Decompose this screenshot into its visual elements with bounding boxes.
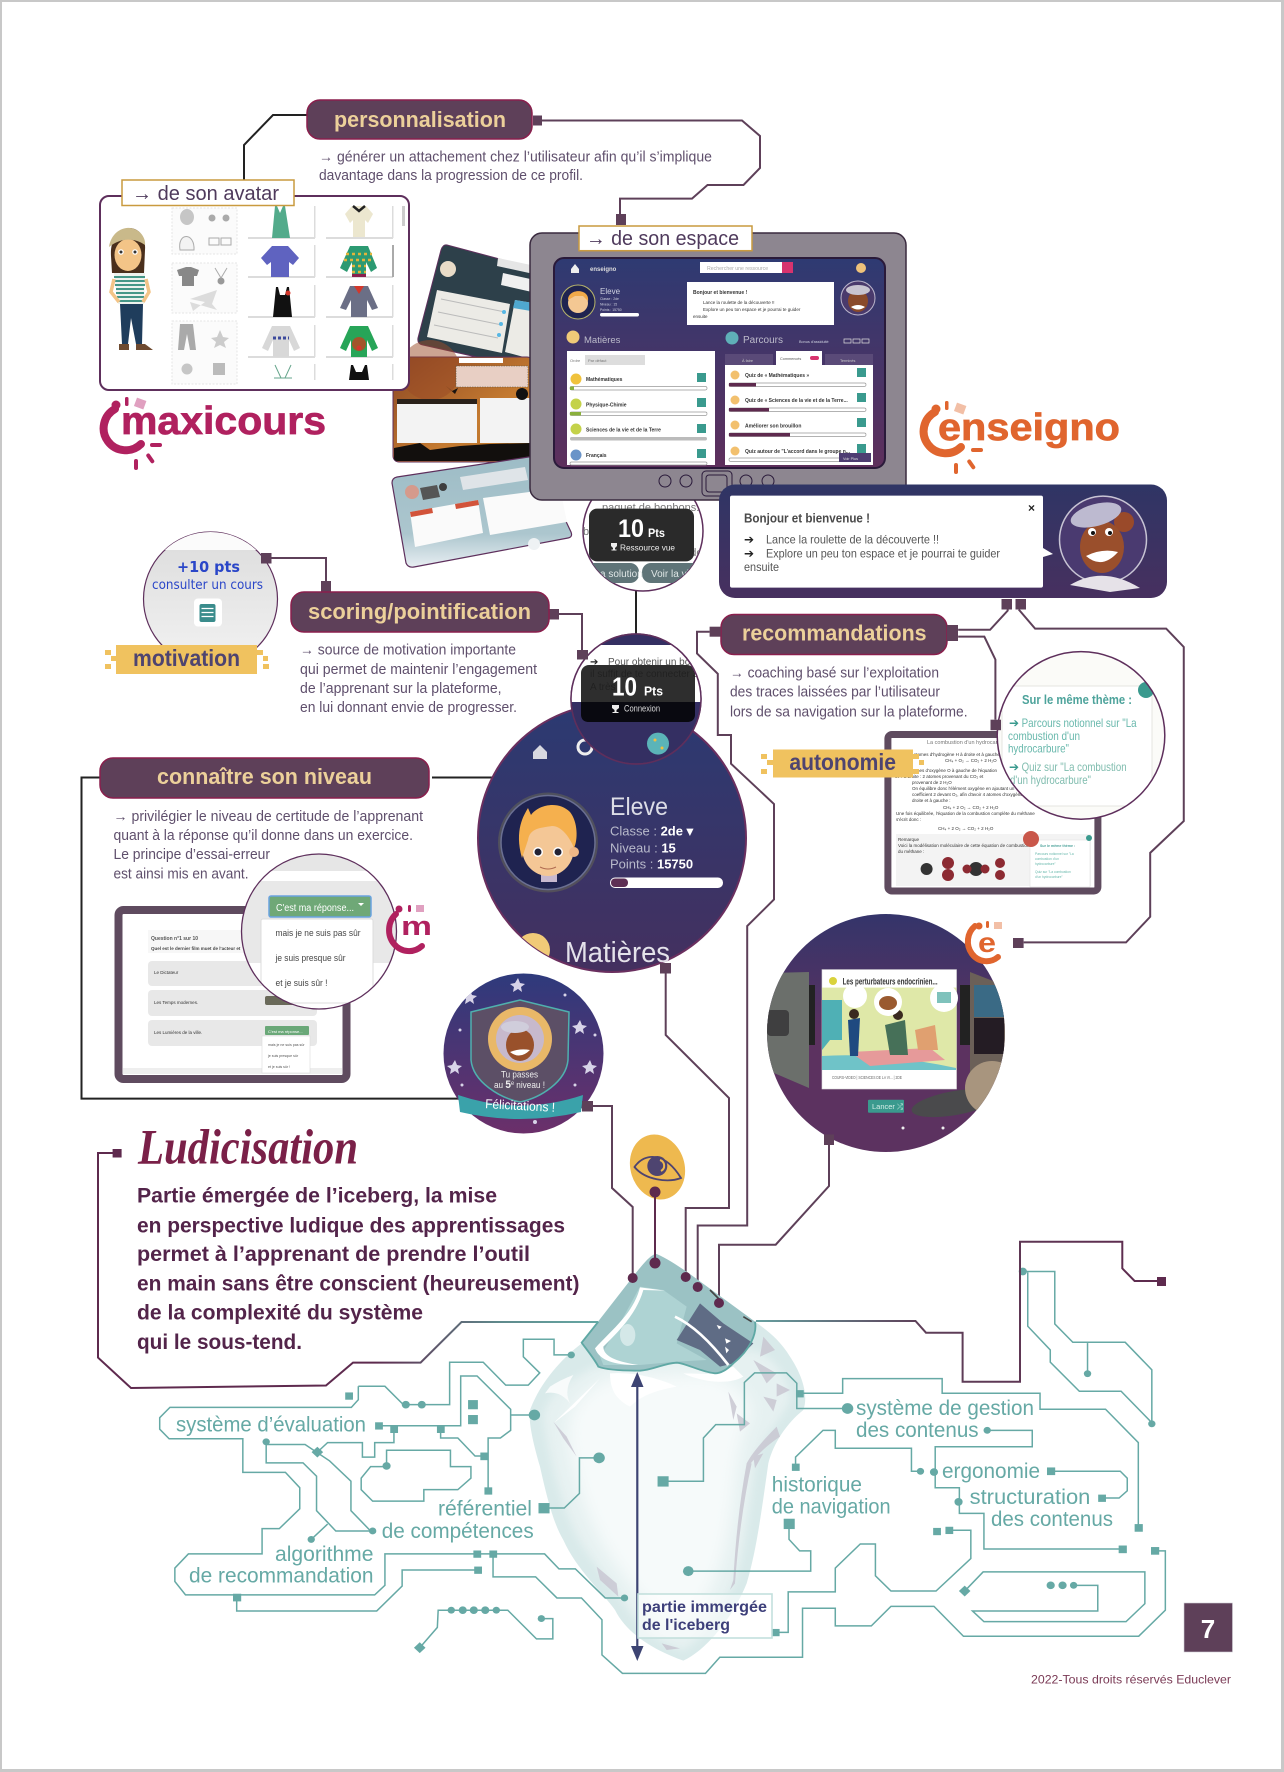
panel: chemistry course screen: d'un hydrocarbure"	[1035, 875, 1063, 879]
text: personnalisation description	[319, 150, 712, 184]
panel: bear welcome dialog: ➔	[744, 532, 754, 546]
text: ludicisation body: permet à l’apprenant de prendre l’outil	[137, 1243, 530, 1266]
panel: quiz laptop	[118, 910, 346, 1079]
video card: COURS-VIDEO | SCIENCES DE LA VI... | 2DE	[832, 1075, 902, 1080]
tablet screen: Sciences de la vie et de la Terre	[586, 428, 661, 434]
avatar parts column	[172, 208, 237, 384]
tag: motivation: motivation	[133, 645, 240, 671]
panel: chemistry course screen: Quiz sur "La combustion	[1035, 870, 1071, 874]
text: scoring description: → source de motivation importante	[300, 643, 516, 659]
tablet screen: Niveau : 15	[600, 302, 617, 306]
tablet screen: Quiz de « Sciences de la vie et de la Terre...	[745, 398, 848, 404]
connector: personnalisation to avatar	[244, 115, 307, 180]
callout: congratulations badge	[444, 974, 604, 1134]
labels: left circuit systems: référentiel	[438, 1498, 532, 1521]
callout: points circle ressource vue: voir un demi-paquet de bonb	[590, 547, 730, 559]
iceberg immerged part	[530, 1322, 805, 1661]
labels: right circuit systems: ergonomie	[942, 1460, 1040, 1483]
panel: quiz laptop: C'est ma réponse...	[268, 1029, 303, 1034]
panel: quiz laptop: Les Temps modernes.	[154, 1000, 198, 1005]
callout: congratulations badge: au 5	[494, 1079, 512, 1091]
tag: motivation	[105, 645, 269, 674]
connector: score points to scoring	[271, 558, 331, 592]
connector: points circles link	[635, 590, 637, 636]
heading: personnalisation	[307, 100, 532, 139]
callout: points circle ressource vue: Ressource vue	[620, 543, 675, 553]
iceberg dots	[628, 1258, 724, 1308]
text: ludicisation body	[137, 1185, 579, 1354]
text: scoring description: qui permet de maintenir l’engagement	[300, 662, 537, 678]
title: Ludicisation: Ludicisation	[137, 1119, 358, 1175]
callout: answer certainty zoom: C'est ma réponse...	[276, 903, 354, 914]
panel: chemistry course screen: CH₄ + O₂ → CO₂ + 2 H₂O	[945, 758, 997, 763]
labels: right circuit systems: des contenus	[856, 1419, 979, 1442]
tag: autonomie	[761, 749, 924, 778]
text: connaitre description: Le principe d’essai-erreur	[114, 847, 270, 863]
callout: points circle connexion	[570, 633, 702, 765]
text: scoring description: en lui donnant envie de progresser.	[300, 700, 517, 716]
iceberg emerged tip	[582, 1254, 755, 1373]
labels: right circuit systems: système de gestion	[856, 1397, 1034, 1420]
panel: chemistry course screen: combustion d'un	[1035, 857, 1059, 861]
panel: bear welcome dialog: Bonjour et bienvenue !	[744, 511, 870, 525]
panel: halloween screenshot	[393, 340, 533, 462]
labels: right circuit systems: historique	[772, 1474, 862, 1497]
callout: motivation points circle: +10 pts	[177, 558, 240, 576]
text: connaitre description	[114, 809, 423, 882]
panel: quiz laptop: Quel est le dernier film muet de l'acteur et	[151, 946, 241, 951]
tablet screen: Améliorer son brouillon	[745, 424, 801, 430]
panel: learner profile circle: Classe : 2de ▾	[610, 824, 694, 839]
clothing cards	[248, 206, 405, 380]
video card: Les perturbateurs endocrinien...	[843, 976, 938, 986]
connector endpoints under bear dialog	[1002, 599, 1026, 610]
text: connaitre description: quant à la réponse qu’il donne dans un exercice.	[114, 828, 413, 844]
circuit: left network	[160, 1339, 642, 1673]
tablet screen: Commencés	[780, 357, 801, 361]
tablet screen: Terminés	[840, 359, 856, 363]
tablet screen: Bonjour et bienvenue !	[693, 290, 748, 296]
panel: chemistry course screen: provenant de 2 H₂O	[912, 780, 952, 785]
connector: ludicisation to iceberg	[98, 1149, 598, 1388]
text: recommandations description: lors de sa navigation sur la plateforme.	[730, 705, 968, 721]
page number	[1184, 1603, 1232, 1652]
tablet screen: Quiz de « Mathématiques »	[745, 373, 809, 379]
icon: avatar girl	[109, 228, 153, 350]
callout: same theme recommendations zoom: ➔	[1009, 760, 1019, 774]
tablet screen: À faire	[742, 359, 753, 363]
tablet screen: enseigno	[590, 267, 617, 273]
panel: bear welcome dialog: ×	[1028, 501, 1035, 515]
connector: connaitre son niveau frame	[82, 778, 510, 1099]
panel: chemistry course screen: coefficient 2 devant O₂, afin d'avoir 4 atomes d'oxygène	[912, 792, 1023, 797]
panel: bear welcome dialog: Lance la roulette de la découverte !!	[766, 532, 939, 546]
label: partie immergee de l'iceberg: partie immergée	[642, 1599, 767, 1616]
panel: chemistry course screen	[888, 734, 1098, 891]
connector: profile to iceberg	[666, 973, 729, 1277]
heading: scoring/pointification	[291, 592, 549, 632]
logo: small enseigno e: e	[978, 927, 996, 958]
logo: small enseigno e	[968, 921, 1002, 961]
panel: bear welcome dialog	[719, 484, 1167, 598]
panel: chemistry course screen: On équilibre donc l'élément oxygène en ajoutant un	[912, 786, 1015, 791]
text: scoring description: de l’apprenant sur la plateforme,	[300, 681, 502, 697]
panel: chemistry course screen: hydrocarbure"	[1035, 862, 1056, 866]
logo: enseigno: enseigno	[938, 407, 1120, 449]
tag: autonomie: autonomie	[789, 749, 896, 775]
callout: motivation points circle	[142, 531, 278, 648]
icon: learner avatar	[501, 796, 595, 890]
panel: quiz laptop: Les Lumières de la ville.	[154, 1030, 202, 1035]
heading: recommandations: recommandations	[742, 620, 927, 646]
logo: enseigno	[924, 401, 1120, 474]
labels: left circuit systems: de recommandation	[189, 1565, 374, 1588]
callout: points circle connexion: A très	[590, 682, 616, 693]
callout: answer certainty zoom: et je suis sûr !	[276, 978, 328, 989]
panel: chemistry course screen: Voici la modélisation moléculaire de cette équation de combustion	[898, 843, 1030, 848]
callout: congratulations badge: Félicitations !	[485, 1096, 555, 1115]
callout: same theme recommendations zoom	[990, 652, 1165, 819]
text: scoring description	[300, 643, 537, 716]
tablet screen: Physique-Chimie	[586, 402, 627, 408]
panel: chemistry course screen: et 4 à droite : 2 atomes provenant du CO₂ et	[895, 774, 984, 779]
circuit: right network	[642, 1268, 1165, 1673]
tablet screen: Points : 15750	[600, 308, 622, 312]
text: ludicisation body: Partie émergée de l’iceberg, la mise	[137, 1185, 497, 1208]
text: ludicisation body: qui le sous-tend.	[137, 1331, 302, 1354]
tablet screen: ensuite	[693, 314, 708, 319]
panel: bear welcome dialog: ➔	[744, 547, 754, 561]
label: de son espace: → de son espace	[586, 228, 739, 250]
callout: same theme recommendations zoom: combustion d'un	[1008, 729, 1080, 743]
footer copyright: 2022-Tous droits réservés Educlever	[1031, 1673, 1231, 1687]
tablet screen: Français	[586, 453, 607, 459]
icon: astronaut bear	[1060, 496, 1146, 592]
panel: avatar customisation	[100, 196, 409, 390]
panel: chemistry course screen: Une fois équilibrée, l'équation de la combustion complète du méthane	[896, 811, 1035, 816]
label: partie immergee de l'iceberg: de l'iceberg	[642, 1617, 730, 1634]
heading: personnalisation: personnalisation	[334, 107, 506, 132]
tablet screen: Classe : 2de	[600, 297, 619, 301]
tablet screen	[554, 258, 885, 468]
panel: chemistry course screen: Il y a 2 atomes d'oxygène O à gauche de l'équation	[895, 768, 998, 773]
heading: connaitre son niveau	[100, 758, 429, 798]
callout: answer certainty zoom	[240, 853, 400, 1009]
text: connaitre description: → privilégier le niveau de certitude de l’apprenant	[114, 809, 423, 825]
panel: learner profile circle: Niveau : 15	[610, 840, 676, 856]
labels: left circuit systems: de compétences	[382, 1520, 534, 1543]
connector: recommandations to iceberg	[697, 632, 774, 1287]
panel: chemistry course screen: s'écrit donc :	[896, 817, 921, 822]
text: ludicisation body: de la complexité du système	[137, 1302, 423, 1325]
panel: learner profile circle: Matières	[565, 937, 670, 969]
labels: right circuit systems	[772, 1397, 1113, 1531]
tablet screen: Mathématiques	[586, 377, 623, 383]
tablet screen: Quiz autour de "L'accord dans le groupe n...	[745, 449, 851, 455]
text: ludicisation body: en perspective ludique des apprentissages	[137, 1214, 565, 1238]
callout: points circle ressource vue: bonbons p	[583, 526, 634, 538]
callout: congratulations badge: niveau !	[514, 1080, 545, 1090]
panel: chemistry course screen: La combustion d'un hydrocarbure	[927, 740, 1008, 746]
callout: points circle ressource vue	[582, 500, 704, 592]
connector: personnalisation to espace	[533, 116, 760, 225]
panel: chemistry course screen: Sur le même thème :	[1040, 844, 1075, 848]
callout: points circle ressource vue: Voir la vidé	[651, 569, 700, 580]
panel: chemistry course screen: Parcours notionnel sur "La	[1035, 852, 1074, 856]
connector: video to iceberg	[719, 1145, 829, 1303]
tablet screen: Par défaut	[588, 358, 607, 363]
eye icon	[622, 1127, 693, 1263]
labels: right circuit systems: structuration	[970, 1486, 1090, 1509]
tablet buttons	[659, 471, 774, 496]
panel: chemistry course screen: CH₄ + 2 O₂ → CO₂ + 2 H₂O	[943, 805, 999, 810]
callout: congratulations badge: Tu passes	[501, 1070, 538, 1080]
panel: winter screenshot	[392, 456, 572, 567]
logo: maxicours: maxicours	[121, 400, 326, 443]
callout: answer certainty zoom: mais je ne suis pas sûr	[276, 928, 360, 939]
callout: points circle connexion: Pour obtenir un bonus	[608, 657, 706, 668]
logo: small maxicours m: m	[401, 911, 432, 941]
tablet screen: Bonus d'assiduité	[799, 340, 829, 344]
text: recommandations description	[730, 666, 968, 721]
callout: same theme recommendations zoom: ➔	[1009, 716, 1019, 730]
panel: chemistry course screen: du méthane :	[898, 849, 924, 854]
connector: badge to iceberg	[593, 1106, 633, 1278]
callout: points circle connexion: il suffit de te connecter 3 fois	[590, 669, 717, 680]
text: personnalisation description: davantage dans la progression de ce profil.	[319, 168, 583, 184]
icon: document	[194, 598, 222, 626]
page number: 7	[1201, 1614, 1215, 1644]
video card	[822, 970, 958, 1089]
tablet screen: Matières	[584, 335, 621, 346]
panel: bear welcome dialog: ensuite	[744, 560, 779, 574]
text: recommandations description: des traces laissées par l’utilisateur	[730, 685, 940, 701]
callout: points circle ressource vue: 10	[618, 515, 644, 543]
callout: points circle connexion: Pts	[644, 684, 663, 698]
tablet screen: Explore un peu ton espace et je pourrai te guider	[703, 307, 801, 312]
callout: points circle connexion: Connexion	[624, 703, 660, 713]
panel: chemistry course screen: 2 atomes d'hydrogène H à droite et à gauche :	[910, 752, 1002, 757]
panel: quiz laptop: et je suis sûr !	[268, 1065, 290, 1069]
callout: points circle connexion: ➔	[590, 657, 598, 668]
panel: video carousel circle	[767, 914, 1019, 1152]
text: connaitre description: est ainsi mis en avant.	[114, 866, 248, 882]
panel: chemistry course screen: Remarque	[898, 837, 920, 842]
panel: quiz laptop: Le Dictateur	[154, 970, 179, 975]
panel: chemistry course screen: droite et à gauche :	[912, 798, 951, 803]
heading: connaitre son niveau: connaître son niveau	[157, 764, 372, 789]
panel: bear welcome dialog: Explore un peu ton espace et je pourrai te guider	[766, 547, 1000, 561]
panel: quiz laptop: je suis presque sûr	[267, 1054, 299, 1058]
logo: small maxicours m	[389, 905, 432, 951]
panel: quiz laptop: Question n°1 sur 10	[151, 936, 198, 942]
callout: same theme recommendations zoom: Parcours notionnel sur "La	[1022, 716, 1137, 730]
labels: left circuit systems: algorithme	[275, 1543, 374, 1566]
tablet screen: Eleve	[600, 287, 621, 296]
labels: left circuit systems: système d’évaluation	[176, 1414, 366, 1436]
tablet screen: Rechercher une ressource	[707, 266, 768, 272]
tablet screen: Voir Plus	[843, 457, 858, 461]
callout: points circle ressource vue: Pts	[648, 526, 665, 540]
connector: scoring to connexion points	[549, 609, 582, 655]
panel: tablet with learner space	[530, 233, 906, 500]
callout: points circle ressource vue: paquet de bonbons.	[602, 502, 699, 514]
tablet screen: Parcours	[743, 335, 783, 346]
heading: scoring/pointification: scoring/pointification	[308, 599, 531, 624]
callout: points circle connexion: 10	[612, 671, 637, 701]
tablet screen: Lance la roulette de la découverte !!	[703, 300, 775, 305]
connector: iceberg to right end	[756, 1242, 1166, 1382]
heading: recommandations	[710, 614, 958, 654]
panel: chemistry course screen: CH₄ + 2 O₂ → CO₂ + 2 H₂O	[938, 826, 994, 831]
callout: same theme recommendations zoom: hydrocarbure"	[1008, 742, 1069, 756]
connector: recommandations to panels	[958, 609, 1184, 942]
labels: right circuit systems: de navigation	[772, 1496, 891, 1519]
label: partie immergee de l'iceberg	[638, 1594, 772, 1638]
text: personnalisation description: → générer un attachement chez l’utilisateur afin qu’il s’implique	[319, 150, 712, 166]
callout: points circle ressource vue: a solution	[600, 569, 643, 580]
callout: motivation points circle: consulter un cours	[152, 578, 263, 593]
callout: answer certainty zoom: je suis presque sûr	[275, 953, 346, 964]
panel: dark rotated screenshot	[418, 245, 560, 370]
logo: maxicours	[104, 397, 326, 470]
panel: learner profile circle: Points : 15750	[610, 857, 693, 872]
callout: same theme recommendations zoom: d'un hydrocarbure"	[1010, 773, 1091, 787]
callout: same theme recommendations zoom: Quiz sur "La combustion	[1022, 760, 1127, 774]
labels: left circuit systems	[176, 1414, 534, 1588]
labels: right circuit systems: des contenus	[991, 1508, 1113, 1531]
callout: congratulations badge: e	[511, 1081, 515, 1087]
tablet screen: Ordre	[570, 358, 581, 363]
panel: learner profile circle: Eleve	[610, 793, 668, 821]
text: ludicisation body: en main sans être conscient (heureusement)	[137, 1273, 579, 1296]
label: de son avatar: → de son avatar	[132, 183, 279, 205]
panel: video carousel circle: Lancer ⤮	[872, 1102, 904, 1111]
panel: learner profile circle	[478, 704, 746, 974]
callout: same theme recommendations zoom: Sur le même thème :	[1022, 692, 1132, 707]
text: recommandations description: → coaching basé sur l’exploitation	[730, 666, 939, 682]
panel: quiz laptop: mais je ne suis pas sûr	[268, 1043, 305, 1047]
arrow: iceberg height	[631, 1372, 644, 1661]
